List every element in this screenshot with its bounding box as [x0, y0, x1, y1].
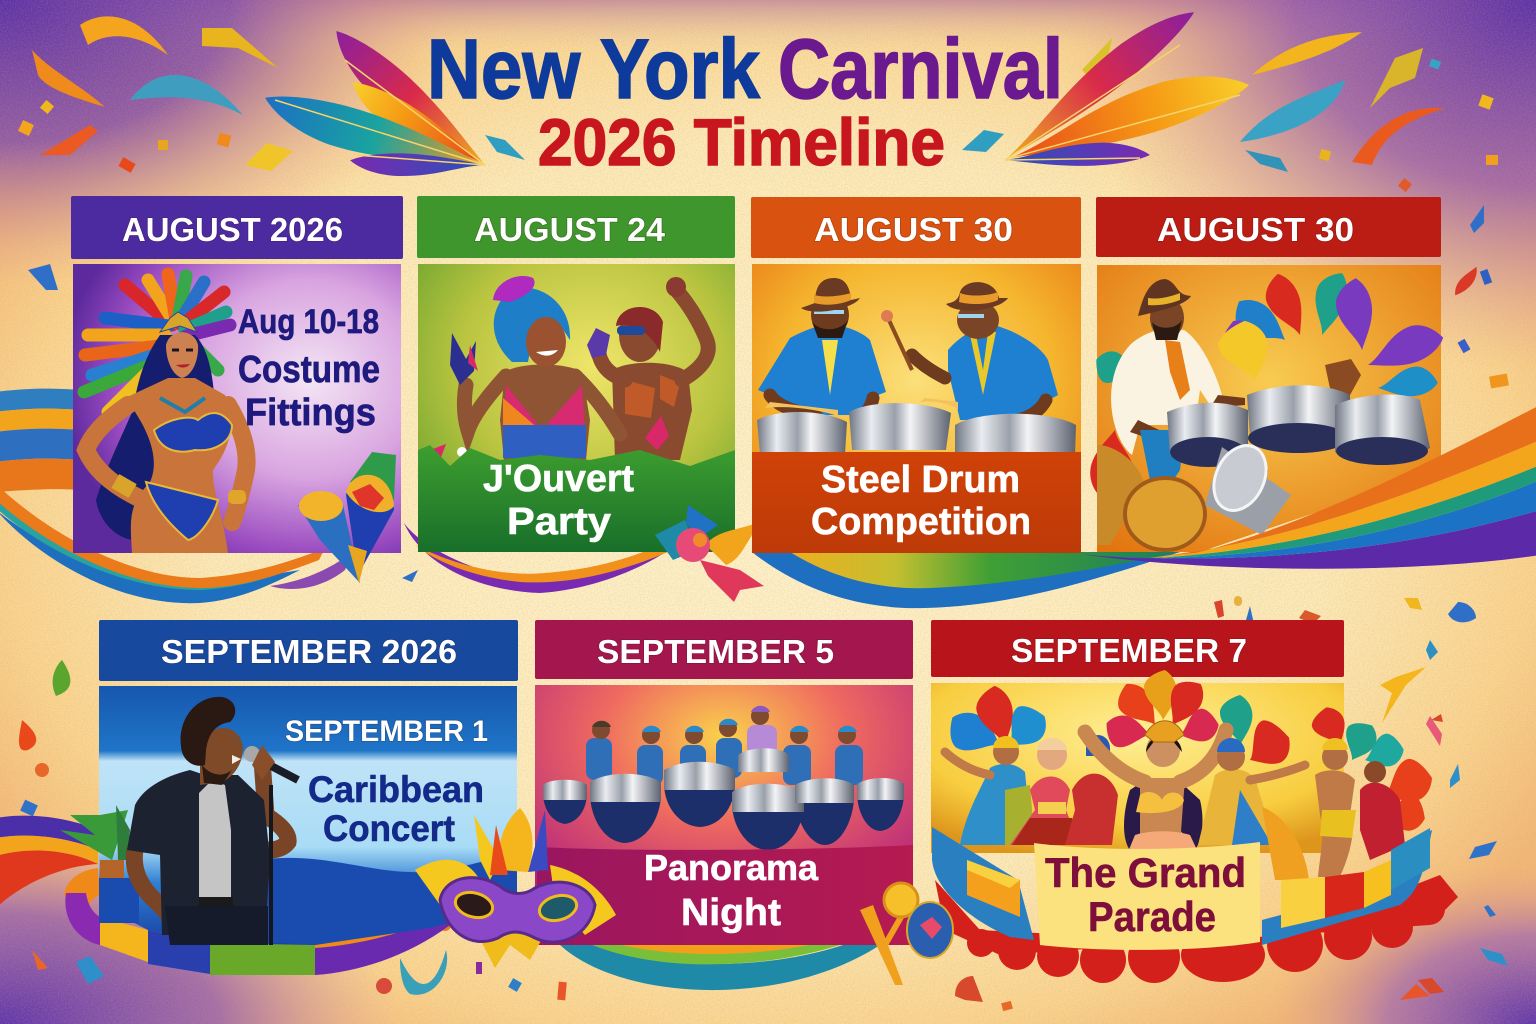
text: dates and event name	[238, 303, 380, 434]
dancer 3	[1065, 774, 1118, 845]
panel: September 5 panorama night	[535, 620, 913, 945]
flag	[1262, 807, 1309, 880]
panel: J'Ouvert party	[417, 196, 764, 602]
arms	[134, 760, 288, 928]
dancer 7	[1360, 783, 1405, 860]
text: event name: Steel Drum	[821, 459, 1020, 501]
text: event name: Party	[507, 501, 611, 543]
illustration: two drummers	[757, 278, 1076, 455]
illustration: singer with microphone	[127, 697, 298, 945]
man	[612, 363, 692, 460]
text: dates and event name: Aug 10-18	[238, 303, 379, 341]
left wall	[932, 827, 1034, 940]
scene background	[99, 686, 517, 945]
text: event name: The Grand	[1045, 849, 1246, 896]
left hat	[801, 278, 860, 312]
scene background	[535, 685, 913, 945]
feathers	[1086, 267, 1448, 504]
right drummer	[948, 324, 1058, 420]
header: August 24	[417, 196, 735, 258]
mallet	[888, 318, 912, 370]
header: August 2026: AUGUST 2026	[122, 211, 343, 248]
text: event name	[811, 459, 1031, 543]
torso and legs	[125, 378, 231, 553]
panel: September 7 grand parade	[931, 620, 1458, 983]
illustration: pan player and feathers	[1086, 265, 1448, 552]
headdress feathers	[940, 669, 1438, 832]
title feathers: left	[257, 21, 495, 190]
ribbon: lower centre rainbow	[560, 905, 880, 990]
band: magenta caption	[537, 845, 913, 945]
text: event name: Competition	[811, 501, 1031, 543]
head	[166, 332, 198, 378]
scalloped skirt	[935, 875, 1458, 983]
blue hair	[494, 287, 570, 362]
shirt	[199, 780, 231, 897]
header: September 2026	[99, 620, 518, 681]
band: orange caption	[752, 452, 1081, 553]
panel: Aug 10-18 costume fittings	[71, 196, 403, 583]
icon: ribbon bow	[655, 505, 764, 602]
text: dates and event name: Fittings	[245, 392, 376, 434]
text: event name	[644, 847, 819, 934]
panel: August 30 steel band	[1080, 197, 1536, 569]
illustration: painted revellers	[418, 276, 735, 552]
icon: party cones	[298, 452, 396, 583]
left drummer	[758, 325, 886, 415]
header: September 7: SEPTEMBER 7	[1011, 632, 1247, 669]
header: August 30: AUGUST 30	[1157, 211, 1354, 248]
header: August 24: AUGUST 24	[474, 211, 666, 248]
panel: Steel drum competition	[751, 197, 1081, 553]
scene background	[418, 264, 735, 552]
text: event name	[1045, 849, 1246, 940]
text: date and event name: Concert	[323, 808, 455, 849]
microphone	[254, 757, 298, 780]
text: dates and event name: Costume	[238, 349, 380, 391]
title: 2026 Timeline	[538, 105, 945, 179]
title: Carnival	[778, 22, 1063, 116]
header: August 30: AUGUST 30	[814, 211, 1013, 248]
neck and head	[200, 728, 243, 785]
ribbon: centre rainbow under panels	[752, 552, 1180, 608]
sign: cream plaque	[1034, 842, 1260, 950]
text: event name	[483, 458, 634, 543]
ribbon: rainbow over panel corner	[1080, 405, 1536, 569]
side drum	[1097, 445, 1145, 545]
blue bikini	[154, 413, 232, 452]
scene background	[752, 264, 1081, 553]
steel pans	[1167, 385, 1430, 535]
illustration: band players	[586, 706, 863, 785]
text: date and event name: SEPTEMBER 1	[285, 715, 488, 748]
illustration: steel pans row	[543, 748, 904, 850]
text: date and event name	[285, 715, 488, 849]
arms	[86, 405, 247, 522]
curly hair	[181, 697, 235, 766]
ribbon: J'Ouvert purple and orange	[404, 523, 672, 593]
text: event name: Night	[681, 892, 781, 934]
text: event name: Parade	[1088, 893, 1216, 940]
splashes	[430, 345, 669, 460]
ribbon: lower left rainbow band	[0, 816, 450, 975]
centre dancer	[1124, 780, 1202, 850]
header: September 7	[931, 620, 1344, 677]
ribbon: upper left rainbow	[0, 389, 352, 603]
dancer 2	[1010, 776, 1080, 845]
jacket	[127, 770, 270, 935]
woman	[500, 364, 590, 470]
scene background	[931, 683, 1344, 853]
dancer 1	[960, 764, 1032, 845]
text: event name: Panorama	[644, 847, 819, 888]
header: September 5	[535, 620, 913, 679]
panel: September 1 Caribbean concert	[60, 620, 518, 945]
title	[427, 22, 1063, 179]
title feathers: right	[993, 0, 1254, 175]
title: New York	[427, 22, 760, 116]
icon: carnival mask	[415, 808, 616, 968]
text: event name: J'Ouvert	[483, 458, 634, 500]
icon: maracas	[860, 883, 953, 985]
text: date and event name: Caribbean	[308, 769, 484, 810]
face	[172, 348, 193, 352]
right wall	[1262, 830, 1432, 945]
player	[1111, 328, 1222, 455]
illustration: town skyline	[260, 850, 517, 945]
header: August 2026	[71, 196, 403, 259]
sticks on pans	[765, 402, 838, 416]
illustration: costumed dancer	[84, 274, 247, 553]
header: August 30	[1096, 197, 1441, 257]
three steel pans	[757, 412, 847, 454]
header: September 5: SEPTEMBER 5	[597, 633, 834, 670]
headdress feathers	[84, 274, 230, 412]
long hair	[96, 335, 214, 540]
dancer 5	[1198, 769, 1275, 845]
header: August 30	[751, 197, 1081, 258]
dancer 6	[1315, 770, 1355, 877]
header: September 2026: SEPTEMBER 2026	[161, 633, 457, 670]
scene background	[73, 264, 401, 553]
illustration: parade dancers	[940, 669, 1438, 880]
illustration: potted palm	[60, 805, 139, 923]
illustration: parade float	[932, 827, 1458, 983]
crown	[160, 312, 197, 332]
